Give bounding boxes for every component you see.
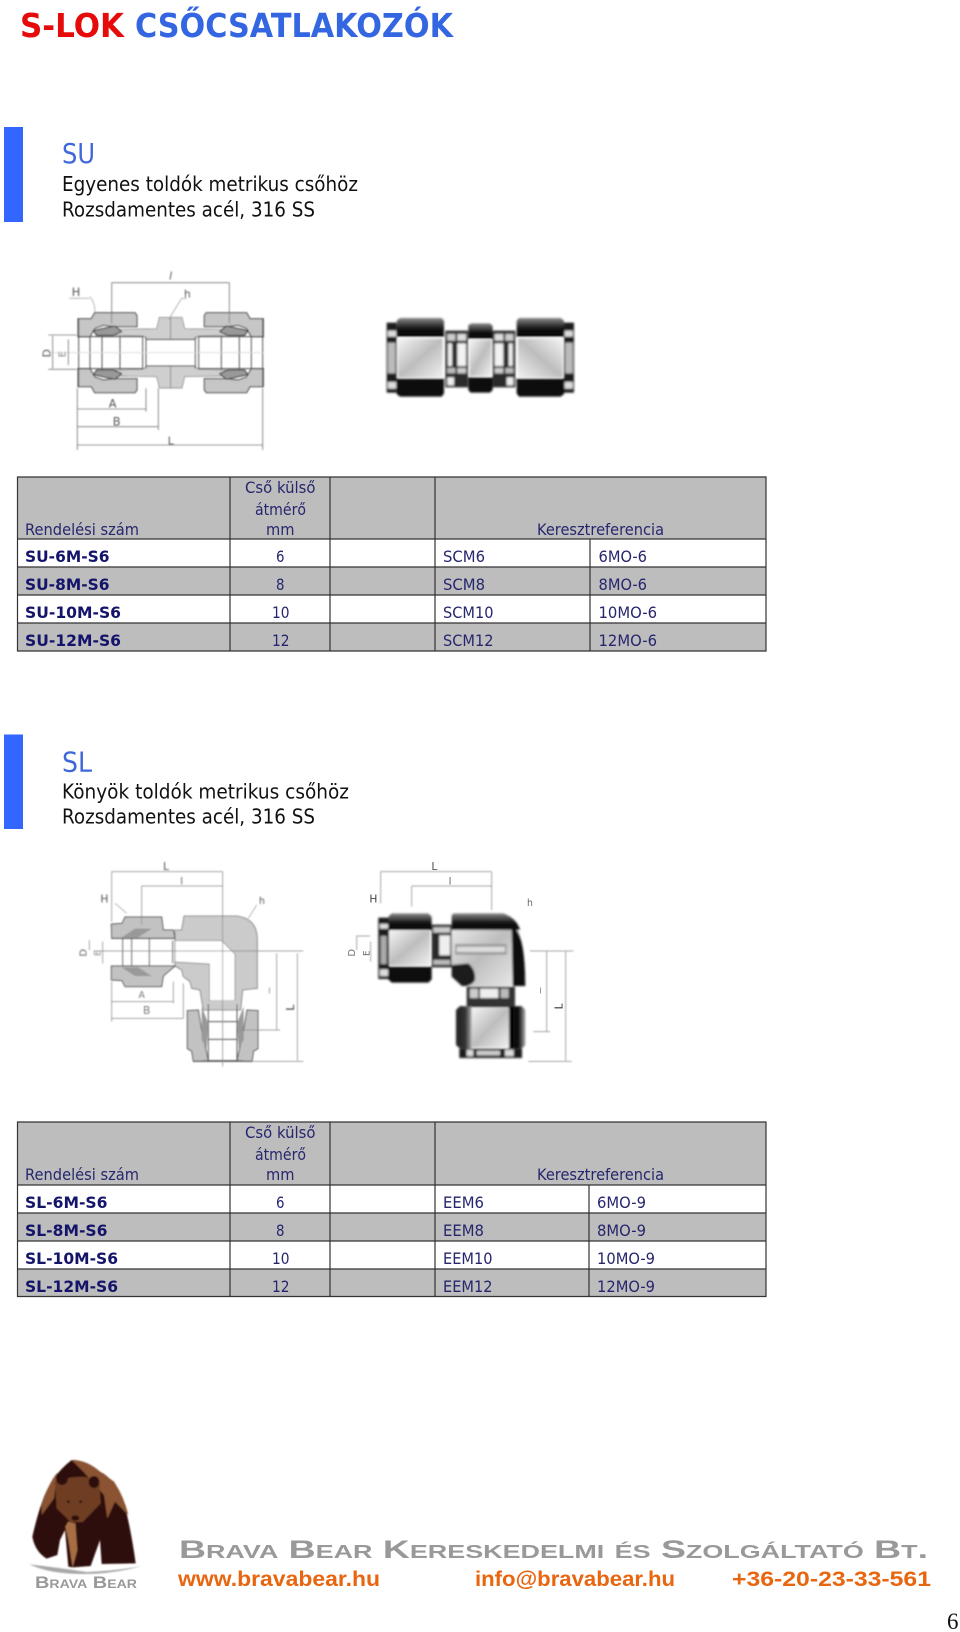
table: SU ordering data: SU-10M-S6 <box>25 603 121 622</box>
technical drawing: SL elbow: L <box>284 1005 297 1011</box>
photo: SL elbow: D <box>347 949 358 957</box>
photo: SL elbow: h <box>527 898 533 909</box>
technical drawing: SL elbow: L <box>163 860 169 873</box>
technical drawing: SU straight union: H <box>72 285 80 299</box>
table: SL ordering data: Keresztreferencia <box>537 1165 664 1184</box>
technical drawing: SL elbow <box>79 860 303 1067</box>
table: SU ordering data: SCM8 <box>443 575 485 594</box>
technical drawing: SU straight union: A <box>109 396 117 410</box>
technical drawing: SU straight union: B <box>113 415 121 429</box>
table: SU ordering data: 10MO-6 <box>598 603 657 622</box>
title: S-LOK <box>20 6 125 45</box>
photo: SL elbow: E <box>362 951 372 956</box>
table: SU ordering data: 6 <box>276 547 284 566</box>
title: CSŐCSATLAKOZÓK <box>135 5 454 45</box>
technical drawing: SL elbow: h <box>259 896 265 907</box>
table: SL ordering data: 12 <box>272 1277 290 1296</box>
technical drawing: SL elbow: D <box>79 949 90 957</box>
technical drawing: SL elbow: l <box>268 986 271 995</box>
heading: SL: Könyök toldók metrikus csőhöz <box>62 780 349 804</box>
section marker: SL <box>4 734 23 829</box>
technical drawing: SU straight union: l <box>169 269 172 282</box>
table: SL ordering data: EEM10 <box>443 1249 492 1268</box>
footer: contact details: info@bravabear.hu <box>475 1568 675 1591</box>
table: SU ordering data: SCM12 <box>443 631 494 650</box>
table: SU ordering data: 8 <box>276 575 284 594</box>
table: SU ordering data: SU-6M-S6 <box>25 547 110 566</box>
table: SL ordering data: SL-12M-S6 <box>25 1277 118 1296</box>
photo: SU straight union <box>387 318 574 397</box>
table: SL ordering data: 6 <box>276 1193 284 1212</box>
table: SU ordering data: 8MO-6 <box>598 575 647 594</box>
technical drawing: SL elbow: E <box>94 951 104 956</box>
photo: SL elbow: L <box>553 1003 566 1009</box>
table: SL ordering data: 8 <box>276 1221 284 1240</box>
table: SU ordering data: 6MO-6 <box>598 547 647 566</box>
footer: company name: Brava Bear Kereskedelmi és Szolgáltató Bt. <box>179 1536 928 1564</box>
heading: SU: Rozsdamentes acél, 316 SS <box>62 198 315 222</box>
technical drawing: SU straight union: h <box>184 287 191 300</box>
table: SU ordering data: SU-8M-S6 <box>25 575 110 594</box>
photo: SL elbow: l <box>449 877 451 888</box>
heading: SL: SL <box>62 746 92 778</box>
logo: Brava Bear: Brava Bear <box>35 1573 137 1592</box>
table: SL ordering data: 10MO-9 <box>597 1249 655 1268</box>
table: SU ordering data <box>18 477 766 651</box>
table: SU ordering data: Rendelési szám <box>25 520 139 539</box>
technical drawing: SL elbow: A <box>138 990 145 1001</box>
table: SU ordering data: Keresztreferencia <box>537 520 664 539</box>
table: SU ordering data: 12MO-6 <box>598 631 657 650</box>
table: SL ordering data <box>18 1122 766 1296</box>
section marker: SU <box>4 127 23 222</box>
heading: SL <box>62 746 349 828</box>
table: SU ordering data: SCM6 <box>443 547 485 566</box>
table: SU ordering data: 12 <box>272 631 290 650</box>
table: SU ordering data: Cső külső <box>245 478 316 497</box>
footer: contact details: +36-20-23-33-561 <box>732 1568 931 1591</box>
technical drawing: SU straight union: E <box>57 351 68 357</box>
table: SL ordering data: SL-8M-S6 <box>25 1221 108 1240</box>
heading: SL: Rozsdamentes acél, 316 SS <box>62 804 315 828</box>
photo: SL elbow: H <box>369 893 377 906</box>
logo: Brava Bear <box>29 1460 142 1592</box>
heading: SU <box>62 137 358 222</box>
title <box>20 5 454 45</box>
table: SL ordering data: Cső külső <box>245 1123 316 1142</box>
table: SU ordering data: SU-12M-S6 <box>25 631 121 650</box>
photo: SL elbow <box>347 860 573 1061</box>
table: SU ordering data: 10 <box>272 603 290 622</box>
heading: SU: Egyenes toldók metrikus csőhöz <box>62 172 358 196</box>
technical drawing: SL elbow: B <box>143 1004 150 1017</box>
technical drawing: SL elbow: l <box>180 877 183 888</box>
technical drawing: SU straight union: L <box>168 434 174 447</box>
table: SL ordering data: 8MO-9 <box>597 1221 646 1240</box>
table: SL ordering data: 6MO-9 <box>597 1193 646 1212</box>
technical drawing: SL elbow: H <box>100 893 108 906</box>
table: SU ordering data: mm <box>266 520 294 539</box>
technical drawing: SU straight union: D <box>41 349 54 357</box>
table: SL ordering data: Rendelési szám <box>25 1165 139 1184</box>
table: SL ordering data: 12MO-9 <box>597 1277 655 1296</box>
footer: contact details <box>177 1568 931 1591</box>
table: SL ordering data: átmérő <box>255 1145 306 1164</box>
technical drawing: SU straight union <box>41 269 264 450</box>
photo: SL elbow: l <box>539 986 542 995</box>
heading: SU: SU <box>62 137 95 170</box>
table: SL ordering data: EEM12 <box>443 1277 492 1296</box>
footer: contact details: www.bravabear.hu <box>177 1568 380 1591</box>
table: SL ordering data: SL-10M-S6 <box>25 1249 118 1268</box>
table: SL ordering data: 10 <box>272 1249 290 1268</box>
table: SL ordering data: EEM8 <box>443 1221 484 1240</box>
table: SL ordering data: mm <box>266 1165 294 1184</box>
table: SL ordering data: EEM6 <box>443 1193 484 1212</box>
table: SL ordering data: SL-6M-S6 <box>25 1193 108 1212</box>
photo: SL elbow: L <box>431 860 437 873</box>
table: SU ordering data: SCM10 <box>443 603 494 622</box>
table: SU ordering data: átmérő <box>255 500 306 519</box>
